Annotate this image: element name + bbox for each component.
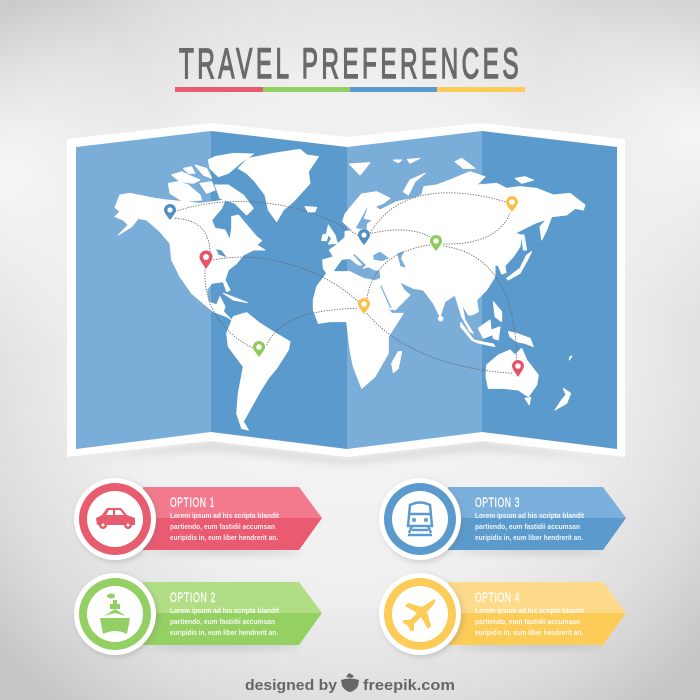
panel: option 2 — [74, 573, 322, 657]
dotted routes west — [175, 202, 360, 348]
ribbon — [448, 487, 626, 550]
pin: green Brazil — [253, 341, 265, 357]
pin: red USA — [200, 250, 212, 269]
body text: partiendo, eum fastidii accumsan — [170, 524, 275, 531]
continents: Americas and Greenland — [115, 149, 318, 430]
badge — [379, 573, 463, 657]
map paper — [67, 123, 625, 457]
ribbon — [143, 582, 322, 645]
title colour bar — [175, 87, 525, 92]
footer credit: freepik.com — [363, 677, 455, 694]
icon: ship — [100, 594, 130, 634]
heading: OPTION 3 — [475, 494, 520, 510]
body text — [170, 608, 280, 637]
heading: OPTION 2 — [170, 589, 216, 605]
body text: Lorem ipsum ad his scripta blandit — [475, 513, 585, 520]
footer credit — [245, 673, 455, 694]
pin: yellow Siberia — [506, 196, 518, 212]
body text — [475, 608, 585, 637]
panel: option 4 — [379, 573, 626, 657]
badge — [74, 478, 158, 562]
badge — [74, 573, 158, 657]
pin: blue Canada — [164, 204, 176, 220]
panel: folded world map — [67, 123, 625, 464]
body text — [475, 513, 585, 542]
body text: euripidis in, eum liber hendrerit an. — [475, 535, 583, 542]
map fold panels — [76, 131, 617, 449]
pin: yellow Africa — [358, 298, 370, 314]
icon: car — [96, 508, 135, 529]
continents: Eurasia, Africa and Oceania — [305, 158, 585, 410]
body text: euripidis in, eum liber hendrerit an. — [170, 630, 278, 637]
pin: green Asia — [430, 235, 442, 251]
body text: partiendo, eum fastidii accumsan — [170, 619, 275, 626]
footer credit: designed by — [245, 677, 338, 694]
pin: blue Europe — [358, 229, 370, 245]
panel: option 3 — [379, 478, 626, 562]
heading: OPTION 1 — [170, 494, 215, 510]
body text: partiendo, eum fastidii accumsan — [475, 619, 580, 626]
icon: freepik logo — [341, 673, 359, 692]
panel: option 1 — [74, 478, 322, 562]
ribbon — [448, 582, 626, 645]
icon: airplane — [402, 599, 435, 632]
dotted routes east — [367, 193, 517, 373]
body text: Lorem ipsum ad his scripta blandit — [170, 608, 280, 615]
ribbon — [143, 487, 322, 550]
body text — [170, 513, 280, 542]
body text: euripidis in, eum liber hendrerit an. — [475, 630, 583, 637]
pin: red Australia — [512, 360, 524, 377]
body text: partiendo, eum fastidii accumsan — [475, 524, 580, 531]
body text: Lorem ipsum ad his scripta blandit — [475, 608, 585, 615]
heading: OPTION 4 — [475, 589, 520, 605]
body text: Lorem ipsum ad his scripta blandit — [170, 513, 280, 520]
body text: euripidis in, eum liber hendrerit an. — [170, 535, 278, 542]
badge — [379, 478, 463, 562]
icon: train — [408, 502, 432, 535]
